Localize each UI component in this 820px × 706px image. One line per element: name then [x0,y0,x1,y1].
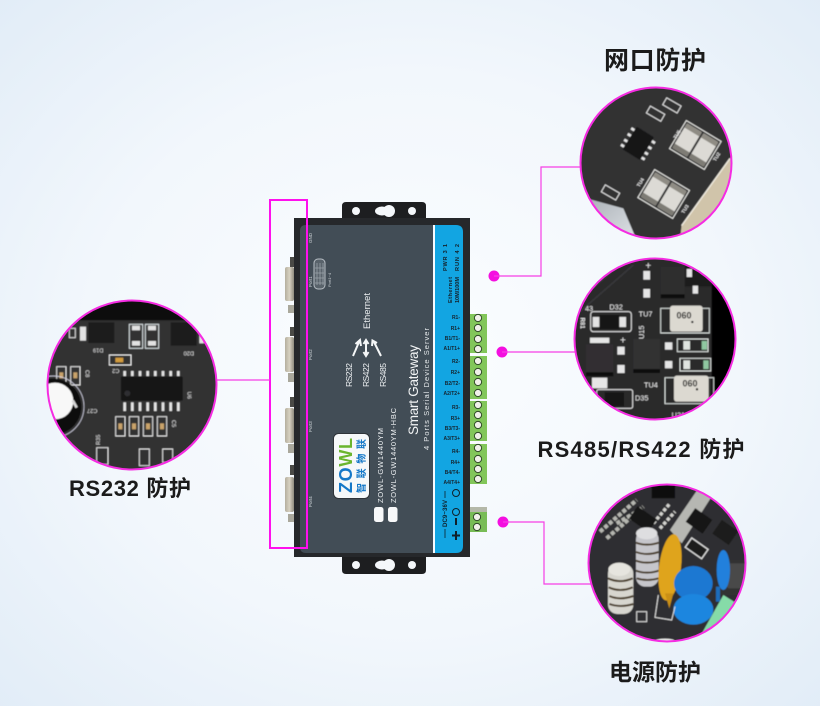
port silk labels: Port4 [308,496,313,507]
signal arrows [353,340,381,356]
blue varistors [673,550,730,625]
silk labels: TU4 [644,381,658,390]
silk labels: C8 [83,370,89,377]
ZOWL logo [334,434,370,498]
port silk labels: Port3 [308,421,313,432]
silk labels: D32 [609,302,623,311]
port silk labels: Port1 [308,276,313,287]
green terminal blocks [470,314,487,532]
enclosure [294,218,470,557]
model numbers [376,407,398,503]
U6 chip [121,377,183,401]
heading: RS232 protection: RS232 防护 [69,476,191,501]
TVS pair lower [638,170,690,218]
diode D32 [591,312,631,332]
resistor right [636,527,659,587]
silk labels: R35 [96,435,102,445]
060 fuse lower [665,378,714,404]
silk labels: TU7 [639,309,653,318]
circle: network PCB [580,86,732,240]
bottom mounting tab [342,556,426,574]
top mounting tab [342,202,426,219]
connector: RS485 [496,346,575,358]
SMD row [57,367,173,466]
silk labels: U6 [185,392,191,399]
interface labels: RS422 [361,363,371,387]
terminal labels: R4+ [451,460,460,466]
gray front panel [300,225,433,553]
ZOWL logo: ZOWL [336,438,356,493]
terminal labels: R4- [452,449,460,455]
silk labels: U21 [672,411,685,420]
device: serial gateway [285,202,487,574]
silk labels: + [620,336,626,347]
white label pills [374,507,398,522]
power labels: DC9~36V [443,500,449,527]
small resistors [677,339,711,371]
terminal labels: A2/T2+ [443,391,460,397]
blue terminal panel [435,225,463,553]
DB9 pinout icon: Port1~4 [327,272,332,287]
silk labels [83,346,194,445]
terminal labels: R3+ [451,416,460,422]
connector line: RS232 [216,379,270,381]
silk labels: D19 [93,346,103,352]
terminal labels: B4/T4- [445,470,460,476]
terminal labels: R1- [452,315,460,321]
terminal labels: R2+ [451,370,460,376]
silk labels: C5 [170,420,176,427]
port silk labels [308,232,313,507]
circle: network PCB: TU4 [636,177,646,188]
circle: RS485 PCB: 060 [682,379,697,389]
heading: RS485/RS422 protection: RS485/RS422 防护 [538,437,744,462]
status labels on blue panel: 10M/100M [455,277,461,303]
silk labels: U15 [637,326,646,339]
heading: network protection: 网口防护 [604,47,706,75]
power labels [443,490,460,540]
heading: power protection: 电源防护 [609,659,701,685]
small parts [645,96,682,123]
network IC [619,125,657,162]
diodes [88,322,114,343]
diode left [586,344,613,374]
product title: Smart Gateway [406,345,421,435]
silk labels: + [645,261,651,272]
terminal labels: R3- [452,405,460,411]
ZOWL logo: 智联物联 [355,439,368,493]
terminal labels: A4/T4+ [443,480,460,486]
terminal labels: B2/T2- [445,381,460,387]
circle: RS485 PCB: 060 [676,310,691,320]
model numbers: ZOWL-GW1440YM-HBC [389,407,398,503]
yellow varistor [658,534,682,609]
status labels on blue panel: PWR 3 1 [443,244,449,271]
status labels on blue panel: RUN 4 2 [455,244,461,271]
circle: RS485 PCB [570,255,740,425]
TVS pair upper [669,121,721,169]
terminal labels [443,315,460,486]
silk labels [579,261,685,420]
DB9 pinout icon [314,259,332,289]
terminal labels: R2- [452,359,460,365]
resistor left [608,563,633,614]
product subtitle: 4 Ports Serial Device Server [422,328,431,450]
diode D35 [597,390,633,408]
port silk labels: Port2 [308,349,313,360]
interface labels [344,363,388,387]
status labels on blue panel: Ethernet [448,277,454,303]
silk labels: R81 [579,318,585,329]
circle: RS232 PCB [46,300,218,470]
DB9 serial connectors [285,257,294,522]
port silk labels: GND [308,232,313,243]
terminal labels: A3/T3+ [443,436,460,442]
circle: power PCB [588,484,746,642]
circle: network PCB: TU2 [712,151,722,163]
capacitors [129,324,159,348]
Ethernet label: Ethernet [362,293,373,329]
silk labels: C27 [87,407,97,413]
interface labels: RS485 [378,363,388,387]
highlight bracket: serial ports [270,200,307,548]
connector: power [498,516,591,584]
silk labels: 43 [585,304,593,313]
circle: network PCB: TU3 [681,204,691,215]
silk labels: D35 [635,393,648,402]
terminal labels: B3/T3- [445,426,460,432]
silk labels: D20 [184,350,194,356]
connector: network [488,167,581,282]
circle: network PCB: TU5 [673,129,683,140]
interface labels: RS232 [344,363,354,387]
U15 diode [634,370,660,371]
silk labels: C2 [112,367,119,373]
060 fuse upper [661,308,709,333]
status labels on blue panel [443,244,461,303]
terminal labels: A1/T1+ [443,346,460,352]
model numbers: ZOWL-GW1440YM [376,428,385,503]
terminal labels: R1+ [451,326,460,332]
electrolytic capacitor [48,374,86,436]
terminal labels: B1/T1- [445,336,460,342]
diode top [661,267,685,297]
